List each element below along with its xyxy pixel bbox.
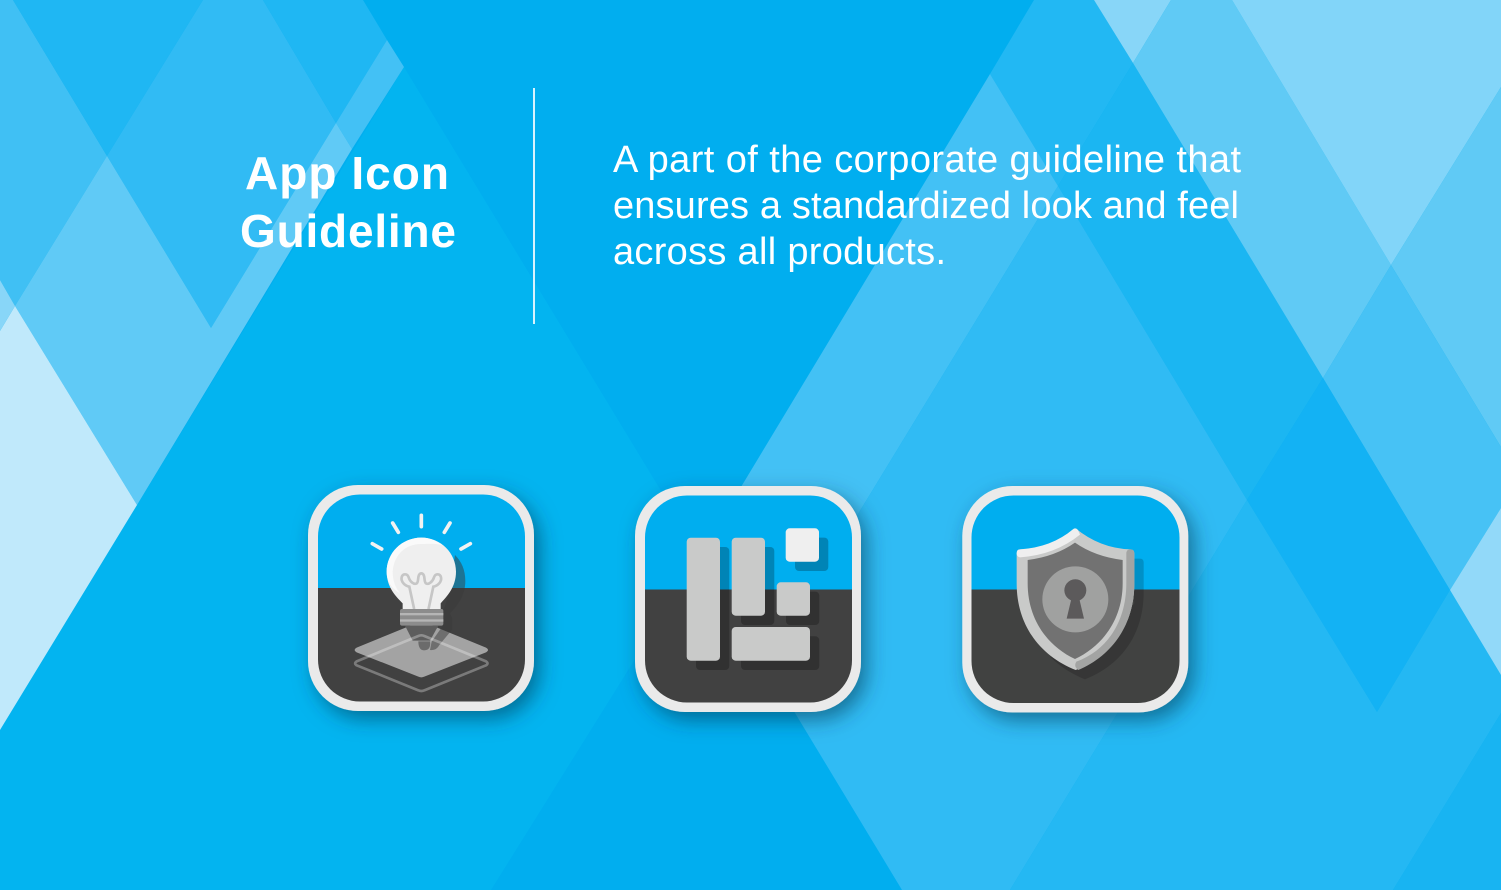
description text: A part of the corporate guideline that [613, 139, 1241, 181]
blocks [687, 528, 819, 661]
keyhole [1064, 579, 1086, 619]
bulb cap [405, 626, 438, 641]
title: App Icon [245, 147, 449, 199]
bulb glass [387, 538, 456, 609]
block shadows [696, 538, 828, 670]
shield top highlight [1017, 528, 1080, 557]
filament [402, 573, 441, 608]
description text: across all products. [613, 231, 946, 273]
bulb screw base [400, 609, 443, 626]
shield inner plate [1028, 543, 1123, 659]
shield body [1017, 528, 1134, 670]
description text: ensures a standardized look and feel [613, 185, 1239, 227]
lock circle [1042, 566, 1108, 632]
light rays [372, 515, 470, 549]
icon: light bulb on layers [308, 485, 534, 711]
layer outline [355, 635, 487, 691]
bulb highlight [387, 538, 443, 593]
layer diamond [355, 622, 488, 677]
shield shadow [1050, 559, 1144, 679]
bulb tip [418, 641, 430, 650]
shield right edge [1075, 549, 1134, 670]
divider [533, 88, 535, 324]
title: Guideline [240, 205, 456, 257]
icon: security shield with keyhole [962, 486, 1188, 712]
icon: dashboard blocks [635, 486, 861, 712]
bulb shadow [430, 555, 465, 650]
